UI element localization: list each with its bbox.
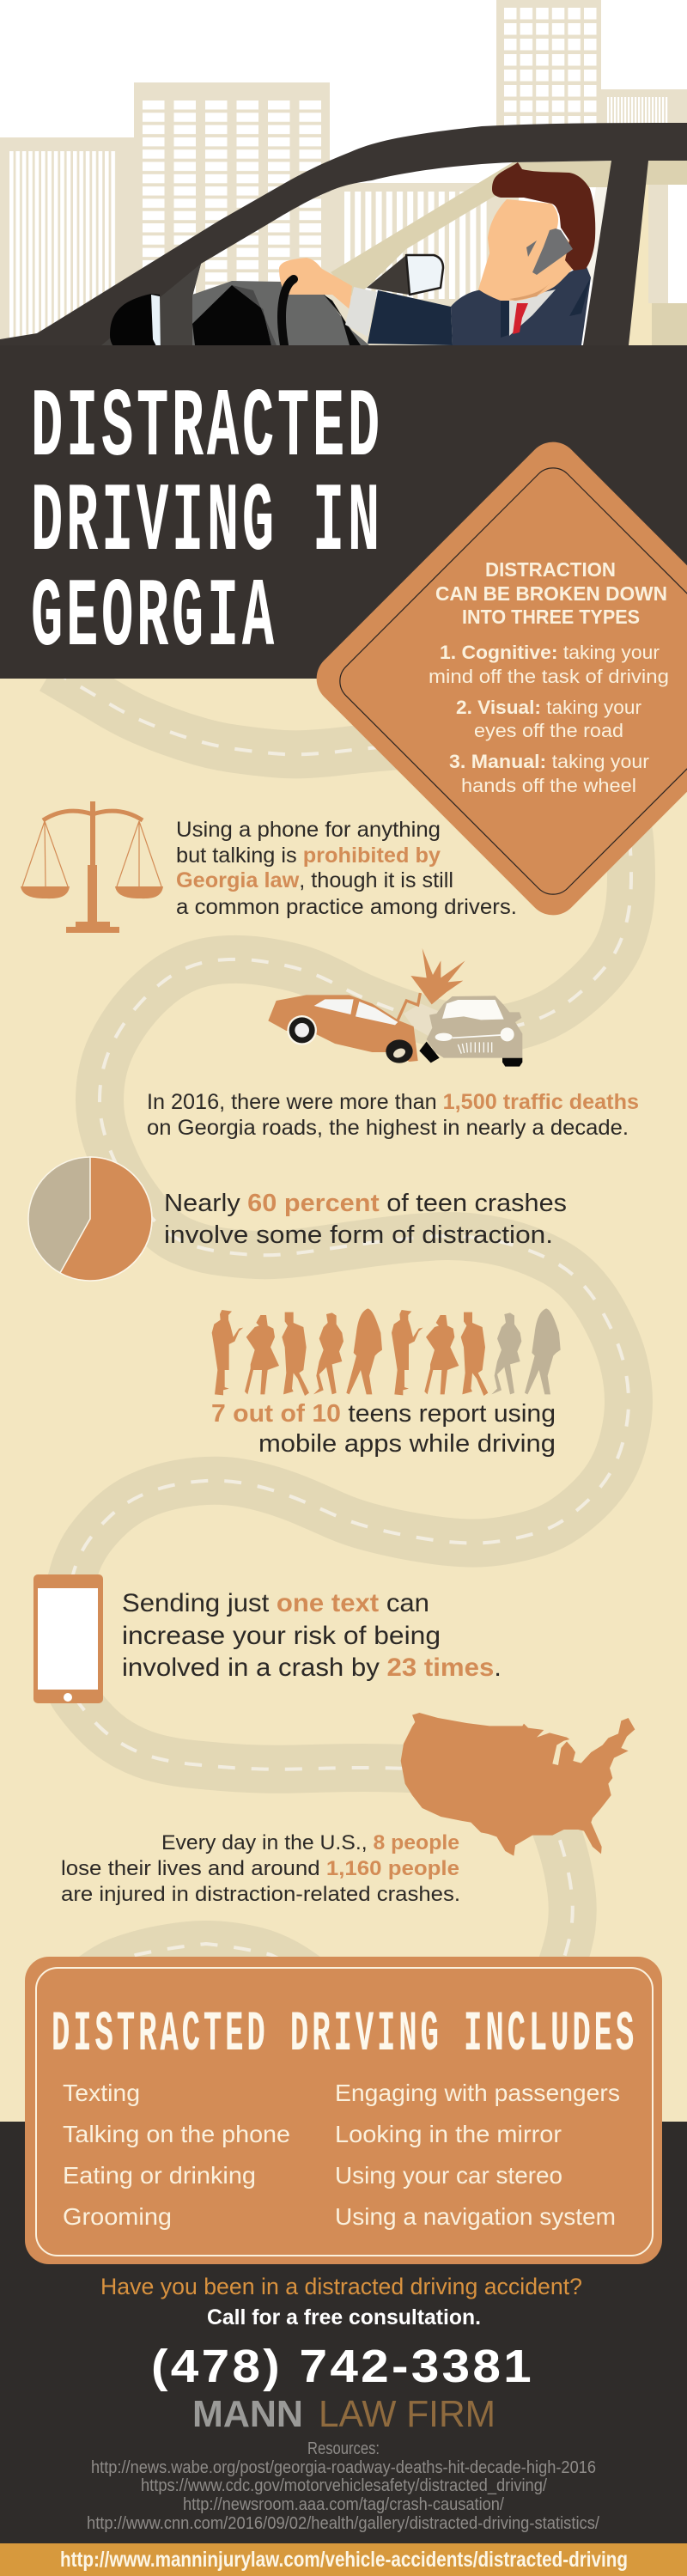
panel: distracted driving includes: Texting bbox=[63, 2080, 140, 2106]
panel: three types of distraction road sign: hands off the wheel bbox=[461, 775, 636, 796]
text: traffic deaths bbox=[147, 1090, 639, 1140]
panel: distracted driving includes: Eating or drinking bbox=[63, 2162, 256, 2189]
resources list: http://news.wabe.org/post/georgia-roadway-deaths-hit-decade-high-2016 bbox=[91, 2458, 596, 2477]
firm logo: MANN bbox=[192, 2393, 303, 2435]
text: mobile apps: mobile apps while driving bbox=[258, 1430, 556, 1458]
resources list bbox=[87, 2439, 599, 2533]
title bbox=[31, 375, 383, 674]
text: daily casualties: are injured in distraction-related crashes. bbox=[61, 1883, 460, 1906]
text: texting risk: Sending just one text can bbox=[122, 1589, 429, 1617]
dark footer background bbox=[0, 2122, 687, 2576]
text: teen crashes: Nearly 60 percent of teen crashes bbox=[164, 1190, 567, 1217]
panel: three types of distraction road sign: DISTRACTION bbox=[485, 558, 616, 581]
text: daily casualties: lose their lives and around 1,160 people bbox=[61, 1857, 459, 1880]
icon: map of the United States bbox=[401, 1713, 635, 1856]
resources list: http://www.cnn.com/2016/09/02/health/gallery/distracted-driving-statistics/ bbox=[87, 2514, 599, 2533]
footer URL bar bbox=[0, 2543, 687, 2576]
cream road background bbox=[0, 670, 687, 2130]
text: phone law: but talking is prohibited by bbox=[176, 843, 441, 868]
resources list: http://newsroom.aaa.com/tag/crash-causation/ bbox=[183, 2495, 504, 2514]
car A-pillar shading bbox=[101, 264, 201, 345]
resources list: Resources: bbox=[307, 2439, 380, 2458]
firm logo bbox=[192, 2393, 495, 2435]
text: mobile apps bbox=[211, 1400, 556, 1458]
title: DRIVING IN bbox=[31, 469, 383, 579]
pie chart: 60 percent bbox=[28, 1157, 152, 1281]
panel: distracted driving includes: Grooming bbox=[63, 2203, 172, 2230]
panel: distracted driving includes: Talking on the phone bbox=[63, 2121, 290, 2147]
text: phone law: a common practice among drivers. bbox=[176, 895, 517, 919]
text: texting risk: increase your risk of being bbox=[122, 1622, 441, 1650]
page background: white sky bbox=[0, 0, 687, 345]
text: phone law: Using a phone for anything bbox=[176, 818, 441, 842]
title: DISTRACTED bbox=[31, 375, 383, 484]
dashboard and steering wheel bbox=[192, 258, 369, 345]
driver on the phone bbox=[345, 162, 595, 345]
panel: distracted driving includes: Using a navigation system bbox=[335, 2203, 616, 2230]
car body silhouette bbox=[0, 123, 687, 378]
text: teen crashes: involve some form of distraction. bbox=[164, 1221, 553, 1249]
panel: three types of distraction road sign: 3. Manual: taking your bbox=[449, 751, 649, 772]
text: mobile apps: 7 out of 10 teens report using bbox=[211, 1400, 556, 1428]
icon: scales of justice bbox=[21, 801, 163, 933]
text: teen crashes bbox=[164, 1190, 567, 1249]
text: daily casualties: Every day in the U.S., 8 people bbox=[161, 1831, 459, 1854]
icon: car crash bbox=[268, 948, 522, 1067]
panel: distracted driving includes: Engaging with passengers bbox=[335, 2080, 620, 2106]
panel: distracted driving includes: Looking in the mirror bbox=[335, 2121, 562, 2147]
side mirror on door bbox=[110, 294, 161, 356]
panel: three types of distraction road sign: 1. Cognitive: taking your bbox=[440, 642, 660, 663]
icon: ten teen silhouettes, seven highlighted bbox=[212, 1308, 561, 1396]
text: traffic deaths: In 2016, there were more than 1,500 traffic deaths bbox=[147, 1090, 639, 1114]
icon: smartphone bbox=[33, 1574, 103, 1703]
phone number: (478) 742-3381 bbox=[151, 2341, 534, 2392]
panel: distracted driving includes bbox=[25, 1957, 662, 2264]
panel: three types of distraction road sign: CAN BE BROKEN DOWN bbox=[435, 582, 667, 605]
winding road bbox=[52, 670, 631, 1988]
call to action question: Have you been in a distracted driving accident? bbox=[100, 2274, 582, 2299]
windshield pillar and side mirror bbox=[331, 161, 611, 296]
panel: distracted driving includes: DISTRACTED DRIVING INCLUDES bbox=[52, 2002, 637, 2067]
text: phone law: Georgia law, though it is still bbox=[176, 868, 453, 892]
dark title band bbox=[0, 345, 687, 679]
firm logo: LAW FIRM bbox=[319, 2393, 495, 2435]
panel: three types of distraction road sign: mind off the task of driving bbox=[429, 666, 669, 687]
panel: three types of distraction road sign: INTO THREE TYPES bbox=[462, 606, 640, 628]
city buildings bbox=[0, 0, 687, 345]
resources list: https://www.cdc.gov/motorvehiclesafety/distracted_driving/ bbox=[141, 2476, 547, 2495]
call to action line: Call for a free consultation. bbox=[207, 2305, 481, 2329]
rear window view bbox=[627, 161, 687, 345]
panel: distracted driving includes: Using your car stereo bbox=[335, 2162, 562, 2189]
panel: three types of distraction road sign bbox=[306, 431, 687, 926]
panel: three types of distraction road sign: 2. Visual: taking your bbox=[456, 697, 641, 718]
text: texting risk bbox=[122, 1589, 502, 1682]
text: phone law bbox=[176, 818, 517, 919]
text: traffic deaths: on Georgia roads, the highest in nearly a decade. bbox=[147, 1116, 629, 1140]
text: daily casualties bbox=[61, 1831, 460, 1906]
text: texting risk: involved in a crash by 23 times. bbox=[122, 1653, 502, 1682]
title: GEORGIA bbox=[31, 564, 277, 674]
panel: three types of distraction road sign: eyes off the road bbox=[474, 720, 623, 741]
